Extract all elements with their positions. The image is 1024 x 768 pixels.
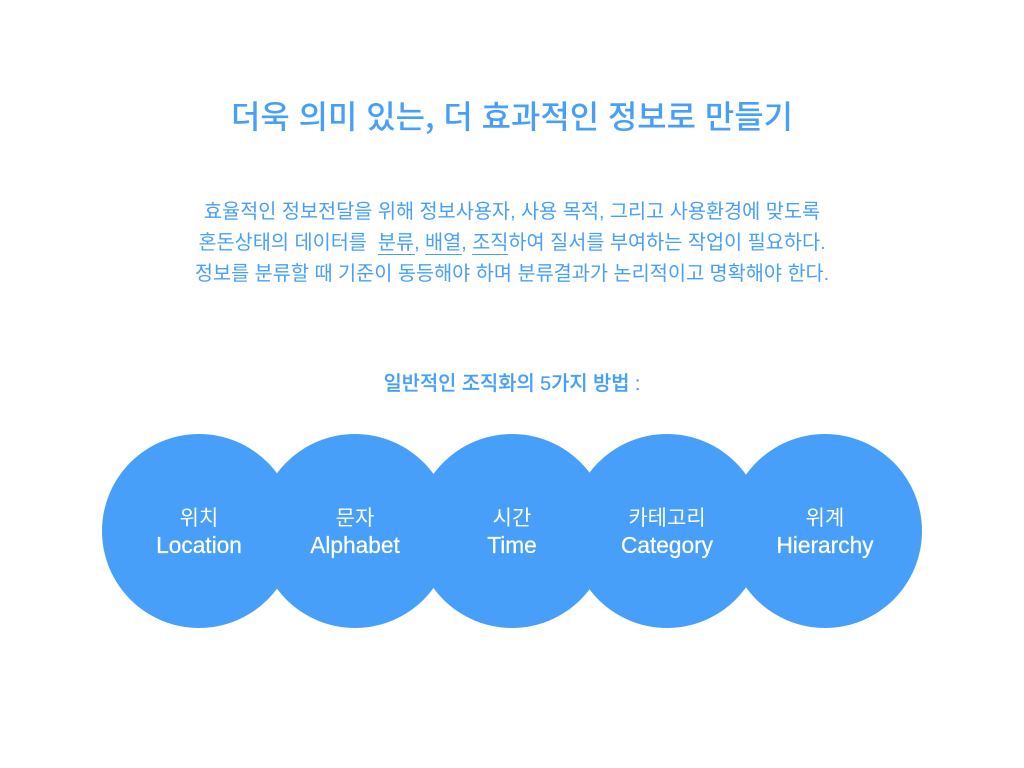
title: 더욱 의미 있는, 더 효과적인 정보로 만들기	[231, 92, 793, 138]
circle: hierarchy	[746, 434, 922, 628]
diagram: five overlapping circles: 위계	[806, 507, 844, 530]
diagram: five overlapping circles: Category	[621, 532, 713, 558]
diagram: five overlapping circles: Time	[487, 532, 537, 558]
circle: category	[590, 434, 746, 628]
text block: description: 효율적인 정보전달을 위해 정보사용자, 사용 목적, 그리고 사용환경에 맞도록	[204, 201, 820, 223]
diagram: five overlapping circles: 위치	[180, 507, 218, 530]
circle: location	[102, 434, 277, 628]
diagram: five overlapping circles: 시간	[493, 507, 531, 530]
text block: description: 혼돈상태의 데이터를 분류, 배열, 조직하여 질서를 부여하는 작업이 필요하다.	[198, 232, 826, 254]
diagram: five overlapping circles: Location	[156, 532, 242, 558]
diagram: five overlapping circles	[102, 434, 922, 628]
circle: alphabet	[277, 434, 434, 628]
diagram: five overlapping circles: Hierarchy	[776, 532, 874, 558]
text block: description: 정보를 분류할 때 기준이 동등해야 하며 분류결과가 논리적이고 명확해야 한다.	[195, 263, 829, 285]
subheading: 일반적인 조직화의 5가지 방법 :	[384, 373, 640, 395]
diagram: five overlapping circles: 문자	[336, 507, 374, 530]
text block: description	[195, 201, 829, 285]
diagram: five overlapping circles: Alphabet	[310, 532, 400, 558]
diagram: five overlapping circles: 카테고리	[628, 507, 706, 530]
circle: time	[434, 434, 590, 628]
